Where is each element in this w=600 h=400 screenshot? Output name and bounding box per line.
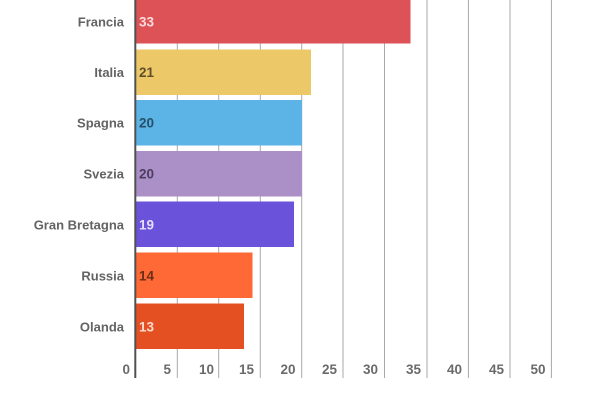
value axis labels: 30 (363, 362, 378, 377)
bar: Italia (135, 50, 311, 95)
bar: Gran Bretagna (135, 202, 294, 247)
value axis labels: 25 (322, 362, 337, 377)
category labels: Gran Bretagna (34, 218, 125, 232)
value axis labels: 40 (447, 362, 462, 377)
category labels: Francia (78, 14, 125, 30)
bar: Svezia: 20 (139, 166, 154, 182)
value axis labels (122, 362, 546, 377)
category labels: Russia (81, 268, 125, 284)
value axis labels: 45 (489, 362, 504, 377)
bar: Spagna: 20 (139, 116, 154, 130)
value axis labels: 15 (239, 362, 254, 377)
category labels: Spagna (77, 116, 125, 130)
vertical axis line (134, 0, 136, 378)
category labels: Italia (94, 65, 125, 80)
value axis labels: 5 (163, 362, 171, 377)
bar: Svezia (135, 151, 302, 196)
bar: Russia (135, 252, 252, 298)
bar: Olanda: 13 (139, 320, 155, 334)
value axis labels: 20 (280, 362, 296, 377)
bar: Russia: 14 (139, 268, 155, 284)
bar: Olanda (135, 304, 244, 349)
bar: Spagna (135, 100, 302, 146)
category labels: Svezia (84, 166, 125, 182)
category labels (34, 14, 125, 334)
value axis labels: 0 (122, 362, 130, 377)
bar: Francia (135, 0, 410, 44)
bar: Francia: 33 (139, 14, 155, 30)
value axis labels: 10 (199, 362, 214, 377)
value axis labels: 50 (530, 362, 546, 377)
bar: Italia: 21 (139, 65, 155, 80)
category labels: Olanda (80, 320, 125, 334)
bar: Gran Bretagna: 19 (139, 218, 154, 232)
value axis labels: 35 (406, 362, 421, 377)
